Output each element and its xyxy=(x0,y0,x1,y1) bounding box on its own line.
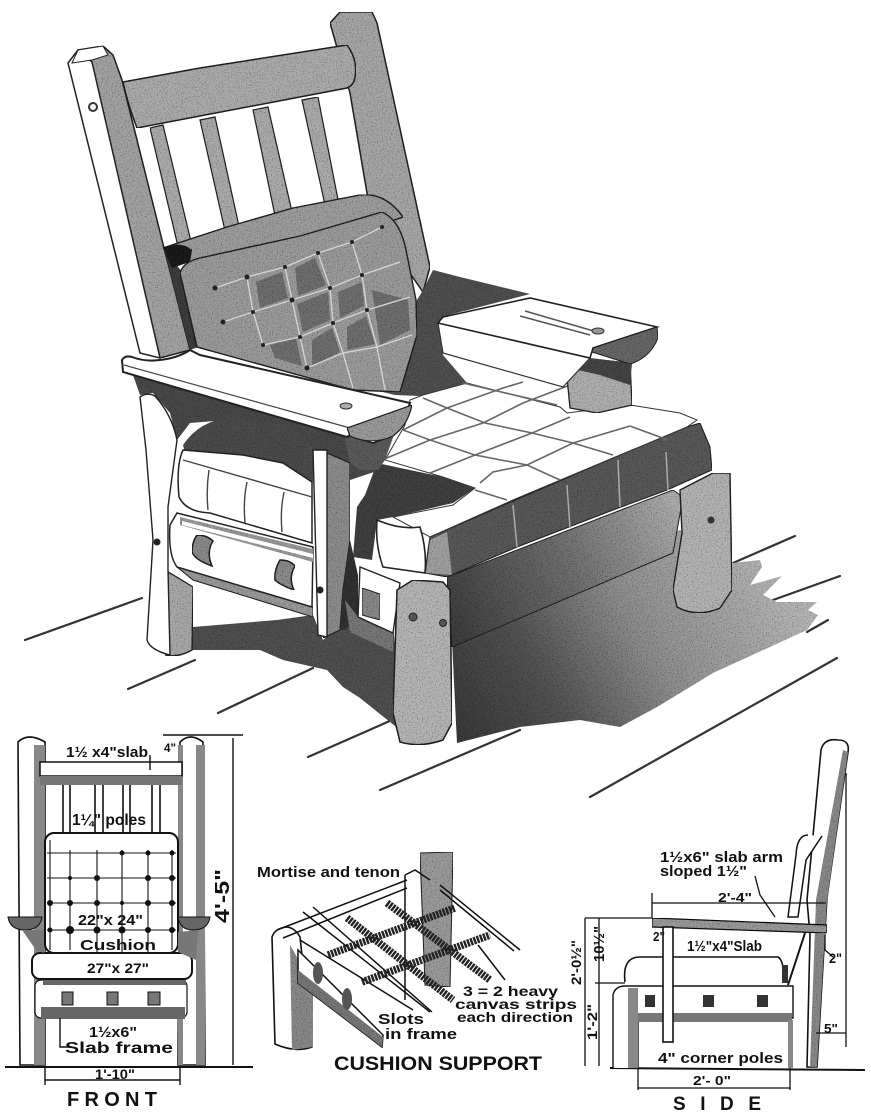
darker cells xyxy=(256,258,410,366)
perspective view of the log chair xyxy=(68,12,818,745)
top rail xyxy=(123,45,356,128)
mortises xyxy=(62,992,160,1005)
side labels: 2" xyxy=(829,950,842,966)
right rear leg xyxy=(673,473,732,613)
frame xyxy=(613,986,793,1068)
cushion body xyxy=(180,212,417,392)
seat cushion xyxy=(32,953,192,979)
left arm xyxy=(122,350,412,443)
center post xyxy=(420,852,453,987)
corner pegs xyxy=(409,613,417,621)
support labels: CUSHION SUPPORT xyxy=(334,1054,542,1075)
cushion grid xyxy=(47,840,176,980)
seat cushion top xyxy=(382,382,697,537)
front labels xyxy=(65,741,234,1111)
right post xyxy=(178,737,205,1065)
dimension lines xyxy=(585,773,846,1090)
support labels: canvas strips xyxy=(455,996,577,1012)
support labels: Slots xyxy=(378,1011,424,1028)
arm top xyxy=(438,298,657,358)
side labels: 2'- 0" xyxy=(693,1073,731,1088)
support labels xyxy=(257,865,577,1075)
dark strip between post and cushion xyxy=(165,250,198,350)
front labels: 4'-5" xyxy=(212,869,234,923)
front labels: FRONT xyxy=(67,1089,157,1111)
side labels: 1½"x4"Slab xyxy=(687,938,762,955)
floor shadow under the side xyxy=(450,530,818,743)
side labels: 4" corner poles xyxy=(658,1050,783,1067)
arm underside xyxy=(438,323,590,387)
front labels: 4" xyxy=(164,741,176,755)
dark wedge in seat xyxy=(353,463,475,560)
back cushion xyxy=(163,195,417,392)
front corner leg xyxy=(393,580,452,745)
side elevation xyxy=(568,740,865,1115)
dimension lines xyxy=(45,735,243,1085)
side labels: 1'-2" xyxy=(584,1004,600,1040)
left post xyxy=(18,737,45,1065)
front labels: 1½x6" xyxy=(89,1024,137,1041)
front labels: Slab frame xyxy=(65,1040,173,1057)
left rear post xyxy=(68,46,190,358)
front elevation xyxy=(5,735,253,1111)
front rail top xyxy=(40,762,182,776)
front labels: Cushion xyxy=(80,937,156,954)
side labels: sloped 1½" xyxy=(660,863,747,880)
post light face xyxy=(68,50,160,358)
side labels: 2'-0½" xyxy=(568,940,584,985)
tuft marks xyxy=(47,850,175,934)
floor shadow under the front xyxy=(192,615,400,730)
cushion top edge xyxy=(163,195,403,264)
frame xyxy=(35,980,187,1018)
front labels: 1½ x4"slab xyxy=(66,744,148,761)
front slab xyxy=(663,927,673,1042)
seat grid lines xyxy=(382,382,668,500)
side labels: 1½x6" slab arm xyxy=(660,849,783,866)
dark pocket xyxy=(163,244,192,268)
side labels: 5" xyxy=(824,1021,838,1036)
arm slot xyxy=(520,311,597,335)
frame rails xyxy=(277,870,520,1012)
left under-arm darkness xyxy=(133,375,380,480)
tufting seams xyxy=(215,227,412,390)
arm end xyxy=(592,327,658,364)
side rail xyxy=(298,950,383,1047)
side labels: 2" xyxy=(653,929,665,944)
seat side panel xyxy=(425,423,712,577)
peg xyxy=(89,103,97,111)
arm ends xyxy=(8,917,42,930)
arm support post under left arm xyxy=(345,432,395,470)
rail mortises xyxy=(192,535,295,590)
front seat block xyxy=(345,520,425,652)
side labels: 10½" xyxy=(591,926,608,962)
right arm xyxy=(438,298,658,387)
front labels: 22"x 24" xyxy=(78,912,143,929)
front labels: 1'-10" xyxy=(95,1066,135,1082)
post shaded face xyxy=(78,46,190,358)
ground line xyxy=(5,1066,253,1068)
arm xyxy=(652,918,827,933)
lower rail band xyxy=(345,600,393,652)
back cushion outline xyxy=(45,833,178,953)
canvas strips xyxy=(328,903,490,1000)
center front post xyxy=(313,450,358,638)
corner pole xyxy=(272,927,312,1049)
top facet xyxy=(72,46,108,63)
arm end xyxy=(347,405,412,441)
side rail xyxy=(447,490,683,647)
side labels: SIDE xyxy=(673,1094,761,1115)
rear post xyxy=(807,740,848,1067)
ground line xyxy=(610,1068,865,1070)
right arm post xyxy=(565,355,632,413)
side labels xyxy=(568,849,842,1115)
front rail xyxy=(170,513,313,617)
front labels: 27"x 27" xyxy=(87,960,149,976)
leg peg xyxy=(154,538,160,546)
support labels: each direction xyxy=(457,1009,573,1025)
left front leg xyxy=(140,394,193,656)
arm shadows xyxy=(22,930,198,960)
right rear post xyxy=(330,12,430,292)
corner of panel xyxy=(426,532,452,575)
front labels: 1¼" poles xyxy=(72,812,146,829)
rail mortises xyxy=(313,962,323,984)
panel seams xyxy=(513,452,668,547)
mortises xyxy=(645,995,768,1007)
slat lines xyxy=(63,785,160,833)
support labels: 3 = 2 heavy xyxy=(463,984,559,999)
floor boards xyxy=(25,536,840,797)
side labels: 2'-4" xyxy=(718,890,752,905)
cushion support detail xyxy=(257,852,577,1075)
support labels: in frame xyxy=(385,1026,457,1043)
back slats xyxy=(150,97,340,255)
cushion seams xyxy=(183,460,312,532)
arm peg xyxy=(340,403,352,409)
back cushion side xyxy=(788,835,822,917)
dark space behind seat xyxy=(353,270,530,396)
front cushion xyxy=(178,418,313,543)
seat cushion xyxy=(625,957,784,982)
support labels: Mortise and tenon xyxy=(257,865,400,881)
tufting buttons xyxy=(212,225,384,370)
